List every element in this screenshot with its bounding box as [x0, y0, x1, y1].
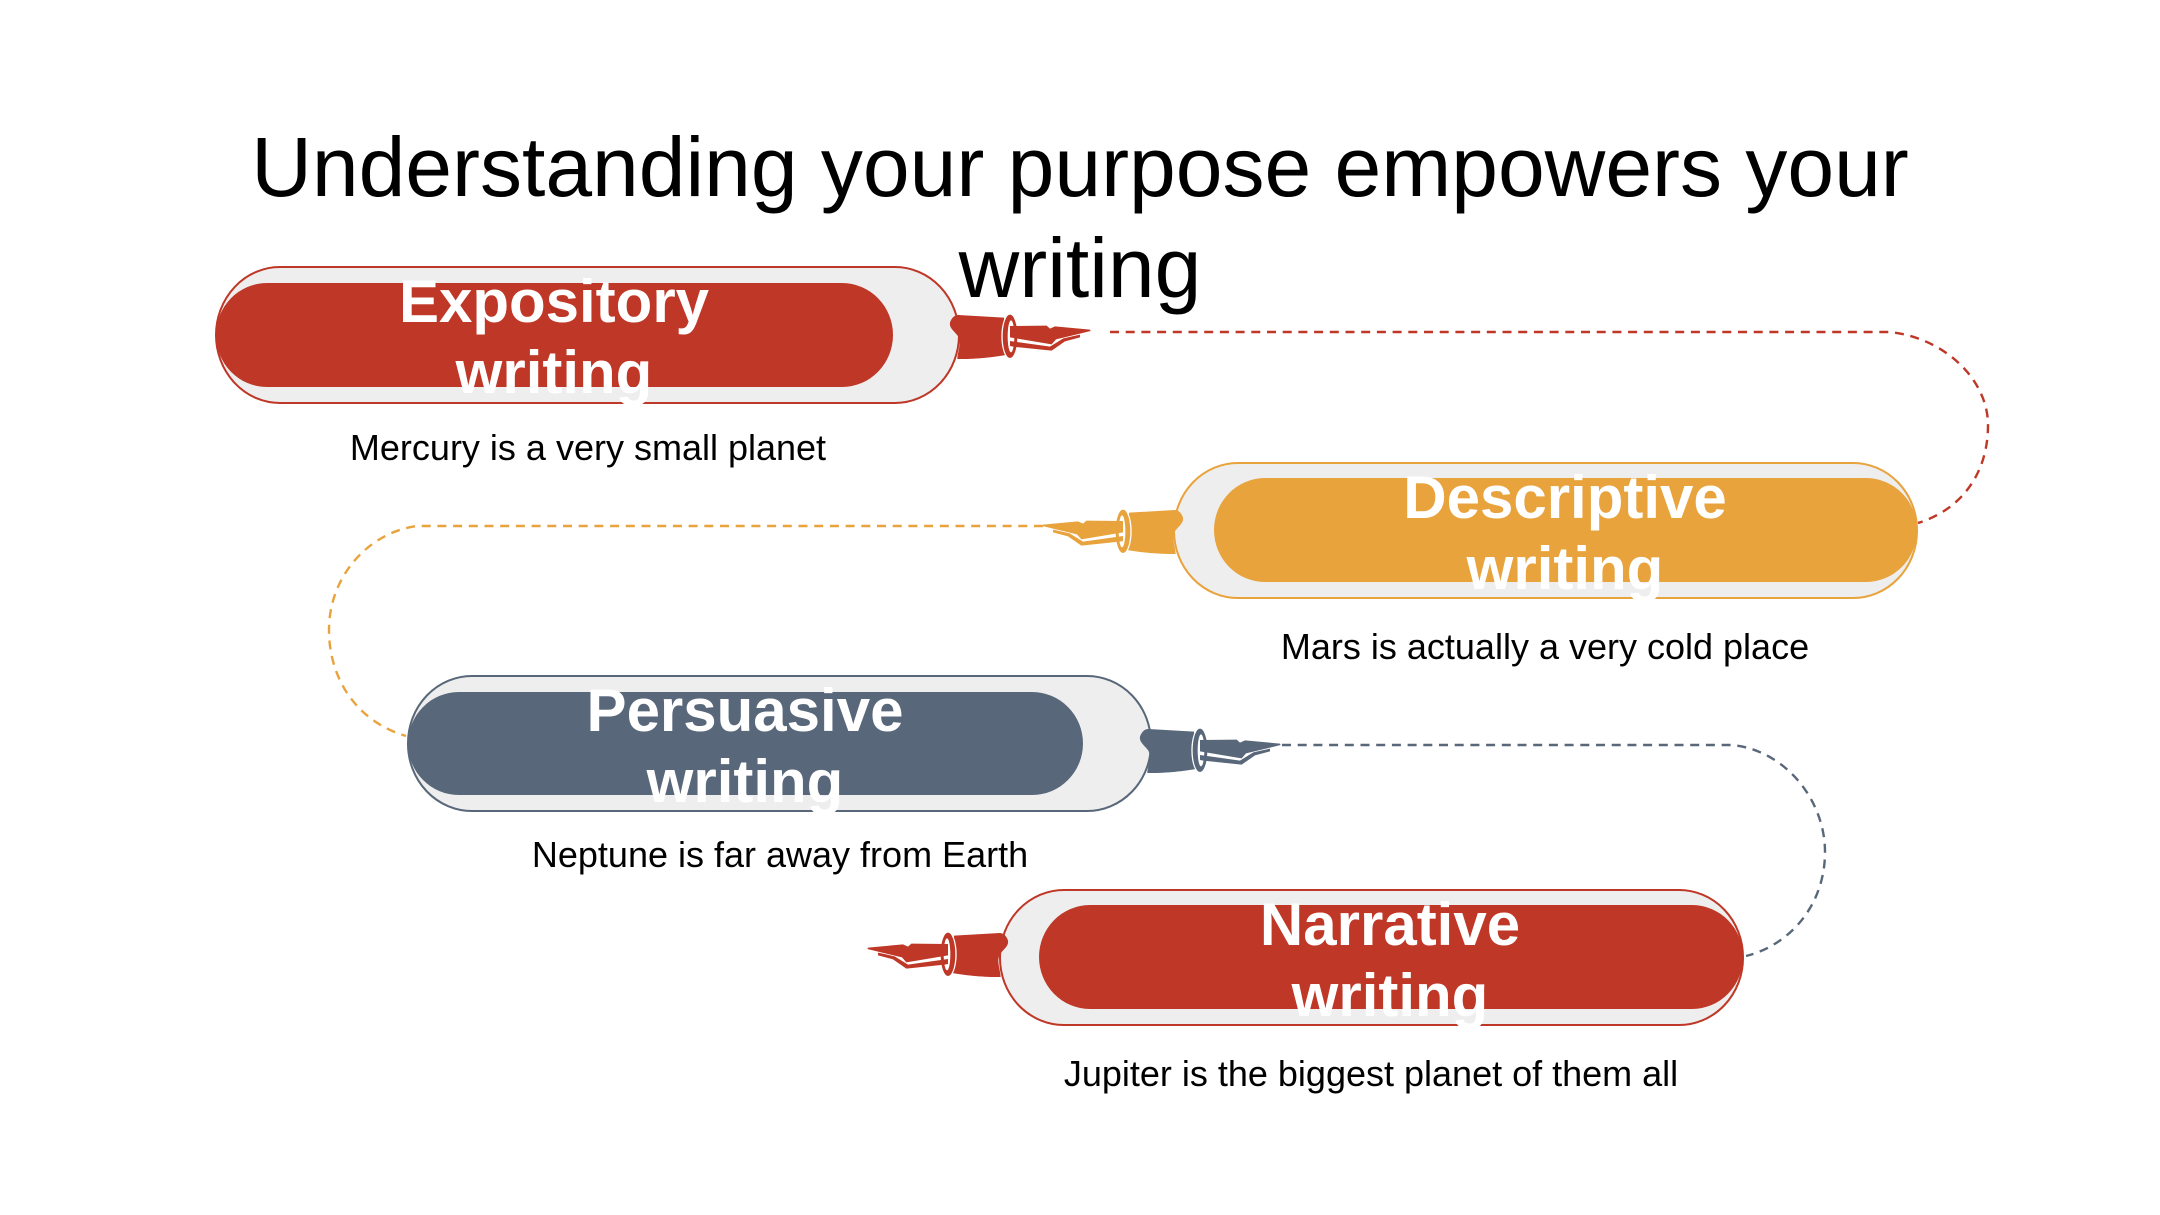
connector: orange dashed line [329, 526, 1043, 736]
pen icon: orange [1042, 508, 1183, 554]
pen icon: red bottom [867, 931, 1008, 977]
panel: narrative writing: Narrative [1260, 891, 1520, 958]
text: mars caption: Mars is actually a very cold place [1281, 626, 1809, 667]
text: jupiter caption: Jupiter is the biggest planet of them all [1064, 1053, 1678, 1094]
panel: persuasive writing: writing [646, 748, 843, 815]
panel: expository writing: writing [455, 339, 652, 406]
pen icon: slate [1140, 727, 1281, 773]
panel: narrative writing: writing [1291, 962, 1488, 1029]
panel: descriptive writing: writing [1466, 535, 1663, 602]
panel: expository writing: Expository [399, 268, 710, 335]
connector: red dashed line [1110, 332, 1988, 523]
connector: slate dashed line [1282, 745, 1825, 956]
text: mercury caption: Mercury is a very small planet [350, 427, 826, 468]
title [251, 120, 1909, 315]
panel: narrative writing [1000, 890, 1743, 1029]
panel: expository writing [216, 267, 959, 406]
panel: persuasive writing: Persuasive [587, 677, 903, 744]
text: neptune caption: Neptune is far away from Earth [532, 834, 1028, 875]
panel: descriptive writing: Descriptive [1403, 464, 1727, 531]
pen icon: red top [950, 313, 1091, 359]
panel: descriptive writing [1174, 463, 1917, 602]
title: Understanding your purpose empowers your [251, 120, 1909, 214]
title: writing [958, 221, 1201, 315]
panel: persuasive writing [408, 676, 1151, 815]
